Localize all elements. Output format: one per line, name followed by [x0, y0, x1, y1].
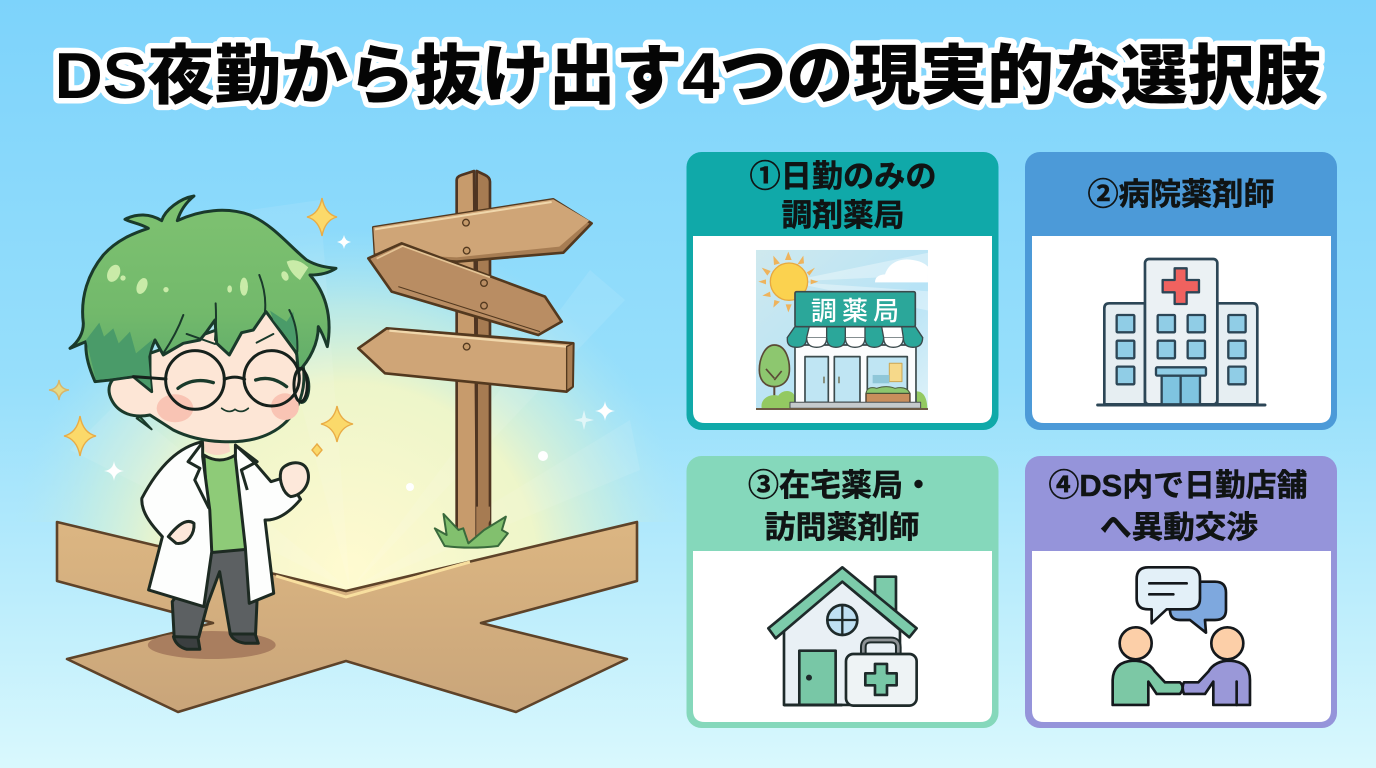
- lapels: [188, 443, 257, 508]
- cloud: [875, 259, 928, 282]
- walls: [795, 345, 916, 403]
- icon: hospital: [1098, 259, 1265, 405]
- trousers: [172, 548, 257, 638]
- window goods: [889, 363, 902, 382]
- icon: pharmacy storefront: 調薬局: [811, 296, 899, 326]
- sun: [758, 252, 818, 312]
- icon: house with medical bag: [768, 567, 917, 706]
- hair highlights: [104, 260, 308, 296]
- heading 3: [748, 468, 934, 545]
- panel 4: transfer negotiation: [1025, 456, 1337, 728]
- lower sign pointing left: [358, 328, 573, 392]
- sparkles: [49, 198, 353, 456]
- doors: [805, 357, 907, 402]
- panel 2: hospital pharmacist: [1025, 152, 1337, 430]
- eyes: [178, 378, 287, 388]
- heading 1: 調剤薬局: [782, 198, 904, 233]
- head: [70, 196, 336, 455]
- crossroads path: [57, 522, 637, 712]
- panel 3: home-visit pharmacy: [686, 456, 998, 728]
- mouth: [222, 408, 248, 411]
- heading 3: 訪問薬剤師: [764, 510, 920, 545]
- heading 2: ②病院薬剤師: [1088, 177, 1274, 212]
- signpost: [358, 171, 592, 543]
- blush: [157, 394, 193, 422]
- planter: [866, 393, 910, 403]
- heading 1: ①日勤のみの: [750, 159, 936, 194]
- coat right and arm: [235, 445, 301, 603]
- neck: [203, 437, 230, 455]
- step: [790, 402, 921, 408]
- hair strands: [163, 275, 297, 353]
- character: [70, 196, 336, 659]
- heading 4: ④DS内で日勤店舗: [1048, 468, 1308, 503]
- hair: [70, 196, 336, 392]
- shop sign: [795, 292, 915, 327]
- icon: pharmacy storefront: [756, 250, 933, 410]
- eyebrows: [187, 334, 273, 344]
- heading 4: へ異動交渉: [1100, 510, 1258, 545]
- shoes: [173, 634, 258, 649]
- post: [457, 171, 490, 543]
- coat left: [142, 442, 212, 607]
- heading 4: [1048, 468, 1308, 545]
- fist right: [280, 463, 308, 497]
- hair shading: [86, 311, 297, 389]
- body: coat and legs: [142, 442, 308, 659]
- fist left: [168, 521, 194, 543]
- shirt: [204, 455, 246, 553]
- tree: [773, 387, 776, 396]
- panel 1: day-shift pharmacy: [686, 152, 1337, 728]
- top sign pointing right: [373, 199, 592, 262]
- icon: two people shaking hands with speech bubbles: [1113, 567, 1250, 705]
- glasses: [133, 351, 307, 409]
- title: DS夜勤から抜け出す4つの現実的な選択肢: [54, 39, 1322, 112]
- heading 1: [750, 159, 936, 233]
- back hair: [137, 417, 152, 429]
- foot shadow: [148, 631, 276, 659]
- ear right: [294, 371, 309, 403]
- awning: [787, 327, 923, 347]
- heading 3: ③在宅薬局・: [748, 468, 934, 503]
- bushes: [761, 391, 927, 408]
- face: [109, 310, 304, 442]
- grass: [435, 507, 508, 548]
- white sparkles: [104, 235, 615, 491]
- middle sign pointing right-down: [368, 243, 562, 335]
